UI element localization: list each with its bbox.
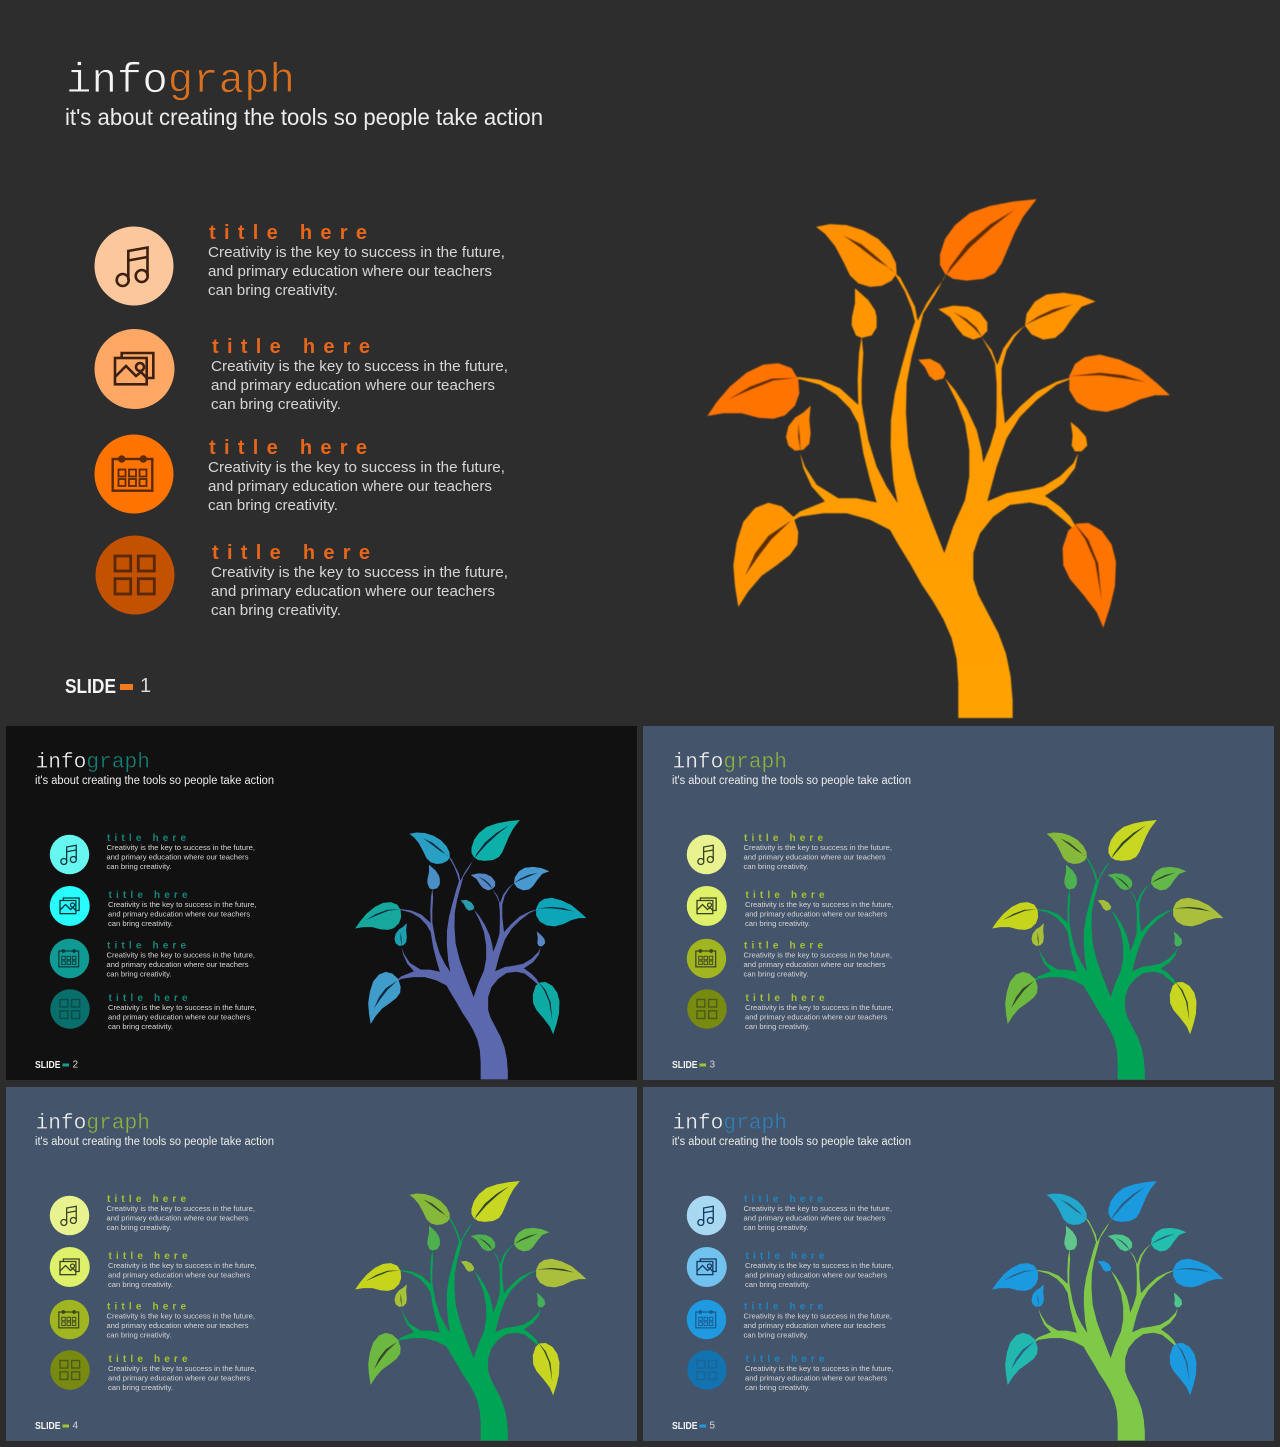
item text: can bring creativity. [208, 498, 338, 514]
item title: title here [212, 336, 370, 358]
item title: title here [744, 1194, 823, 1205]
list item 2 [50, 1247, 256, 1289]
item text [108, 1261, 256, 1289]
item text [744, 950, 892, 978]
list item 4 [50, 989, 256, 1031]
item text [744, 1312, 892, 1340]
leaves [355, 820, 586, 1034]
leaves [992, 820, 1223, 1034]
item title: title here [108, 993, 188, 1004]
trunk [1028, 856, 1184, 1080]
item title: title here [744, 1302, 823, 1312]
item text: can bring creativity. [744, 862, 808, 871]
item text: and primary education where our teachers [211, 584, 495, 600]
list item 1 [687, 1194, 892, 1235]
item text: Creativity is the key to success in the future, [208, 460, 505, 476]
tree illustration [355, 820, 586, 1080]
slide number [65, 675, 151, 698]
icon: calendar [687, 1300, 726, 1339]
subtitle: it's about creating the tools so people take action [672, 1135, 911, 1148]
subtitle: it's about creating the tools so people take action [35, 1135, 274, 1148]
slide number: 1 [140, 675, 151, 697]
item text [745, 1003, 894, 1031]
item text: and primary education where our teachers [108, 910, 250, 918]
item text: Creativity is the key to success in the future, [108, 1261, 256, 1270]
icon: music [50, 1196, 89, 1235]
list item 4 [96, 536, 508, 619]
item title: title here [744, 833, 823, 844]
item title: title here [746, 1354, 825, 1365]
item text: can bring creativity. [745, 919, 810, 928]
item text: and primary education where our teachers [108, 1012, 250, 1022]
subtitle: it's about creating the tools so people take action [672, 774, 911, 787]
item text: and primary education where our teachers [744, 1321, 886, 1330]
slide number: SLIDE [65, 676, 116, 698]
title: infograph: infograph [672, 1112, 787, 1136]
list item 4 [687, 1350, 894, 1392]
slide number: 4 [72, 1420, 78, 1432]
item text [211, 359, 508, 413]
slide number: 5 [710, 1420, 716, 1432]
item text: can bring creativity. [745, 1022, 810, 1031]
item text: and primary education where our teachers [108, 1270, 250, 1280]
item text: and primary education where our teachers [745, 910, 887, 918]
item text: Creativity is the key to success in the future, [745, 1003, 894, 1012]
icon: grid [96, 536, 174, 614]
item text [108, 1003, 256, 1031]
list item 1 [687, 833, 892, 874]
slide number [672, 1420, 716, 1432]
item text: Creativity is the key to success in the future, [744, 843, 892, 852]
item title: title here [209, 437, 367, 459]
slide number: SLIDE [672, 1060, 698, 1071]
item text [745, 1261, 894, 1289]
title: infograph: infograph [36, 1112, 150, 1136]
item text: Creativity is the key to success in the future, [211, 565, 508, 581]
icon: grid [687, 989, 727, 1029]
item text: Creativity is the key to success in the future, [106, 1204, 255, 1213]
icon: picture [94, 329, 174, 409]
item text [106, 843, 255, 871]
item text [108, 1364, 256, 1392]
item text [106, 1204, 255, 1232]
leaves [992, 1181, 1223, 1395]
item text: can bring creativity. [106, 1330, 172, 1340]
item text: and primary education where our teachers [744, 1214, 886, 1222]
trunk [391, 1217, 547, 1441]
item text [745, 1364, 894, 1392]
item text [745, 900, 894, 928]
item text: can bring creativity. [745, 1383, 810, 1392]
tree illustration [992, 820, 1223, 1080]
icon: picture [687, 1247, 727, 1287]
slide number: 3 [710, 1060, 716, 1070]
item text: can bring creativity. [744, 970, 808, 978]
item text: and primary education where our teachers [208, 479, 492, 495]
item text [744, 843, 892, 871]
slide number: SLIDE [35, 1421, 61, 1432]
title: infograph: infograph [672, 752, 787, 774]
panel: slide 1 [65, 57, 1170, 718]
icon: grid [50, 989, 90, 1029]
item text: Creativity is the key to success in the future, [211, 359, 508, 375]
item text: and primary education where our teachers [745, 1374, 887, 1382]
item text: can bring creativity. [108, 1022, 173, 1031]
item text: Creativity is the key to success in the future, [108, 1364, 256, 1373]
item text: and primary education where our teachers [211, 378, 495, 394]
item title: title here [107, 940, 186, 952]
icon: calendar [687, 939, 726, 978]
panel: slide 5 [643, 1087, 1274, 1441]
item text [211, 565, 508, 619]
item text: can bring creativity. [745, 1280, 810, 1289]
item text: Creativity is the key to success in the future, [106, 1312, 255, 1320]
slide number [672, 1060, 716, 1071]
list item 3 [50, 939, 255, 978]
item text: can bring creativity. [106, 1223, 172, 1232]
item text: and primary education where our teachers [106, 1321, 249, 1330]
list item 3 [687, 939, 892, 978]
icon: calendar [50, 939, 89, 978]
list item 4 [687, 989, 894, 1031]
item text: and primary education where our teachers [745, 1270, 887, 1280]
item text: can bring creativity. [211, 603, 341, 619]
title: infograph: infograph [66, 57, 295, 105]
item text: can bring creativity. [108, 919, 173, 928]
list item 1 [50, 833, 255, 874]
panel: slide 2 [6, 726, 637, 1080]
item text: Creativity is the key to success in the future, [745, 900, 894, 909]
item text: and primary education where our teachers [106, 960, 249, 969]
icon: calendar [50, 1300, 89, 1339]
list item 4 [50, 1350, 256, 1392]
item text: Creativity is the key to success in the future, [108, 1003, 256, 1012]
icon: grid [687, 1350, 727, 1390]
item text: Creativity is the key to success in the future, [106, 843, 255, 852]
leaves [707, 199, 1170, 628]
item text: can bring creativity. [208, 283, 338, 299]
list item 2 [687, 1247, 894, 1289]
item text: Creativity is the key to success in the future, [108, 900, 256, 909]
item title: title here [107, 1302, 186, 1312]
item text: Creativity is the key to success in the future, [744, 950, 892, 960]
icon: picture [50, 1247, 90, 1287]
item title: title here [746, 993, 825, 1004]
item text: can bring creativity. [106, 970, 172, 978]
item text: and primary education where our teachers [744, 852, 886, 862]
item text: Creativity is the key to success in the future, [745, 1364, 894, 1373]
slide number [35, 1060, 78, 1068]
item text [744, 1204, 892, 1232]
title: infograph: infograph [36, 752, 150, 774]
list item 2 [94, 329, 508, 413]
item text: can bring creativity. [106, 862, 172, 871]
icon: picture [50, 886, 90, 926]
item title: title here [108, 1251, 188, 1262]
item title: title here [744, 940, 823, 952]
item text [208, 245, 505, 299]
item text: and primary education where our teachers [106, 1214, 249, 1222]
tree illustration [355, 1181, 586, 1441]
item text: can bring creativity. [211, 397, 341, 413]
item title: title here [746, 1251, 825, 1262]
item text: Creativity is the key to success in the future, [744, 1204, 892, 1213]
list item 3 [94, 434, 505, 514]
item title: title here [746, 890, 825, 901]
item text: can bring creativity. [108, 1280, 173, 1289]
item text: Creativity is the key to success in the future, [208, 245, 505, 261]
item title: title here [108, 1354, 188, 1365]
item text [106, 950, 255, 978]
icon: music [50, 835, 89, 874]
icon: music [94, 226, 174, 306]
trunk [391, 856, 547, 1080]
item title: title here [108, 890, 188, 901]
item text: can bring creativity. [744, 1223, 808, 1232]
list item 3 [50, 1300, 255, 1340]
item text: and primary education where our teachers [745, 1012, 887, 1022]
subtitle: it's about creating the tools so people take action [65, 104, 543, 130]
item text: Creativity is the key to success in the future, [745, 1261, 894, 1270]
slide number: 2 [72, 1060, 78, 1070]
leaves [355, 1181, 586, 1395]
list item 2 [687, 886, 894, 928]
item text [108, 900, 256, 928]
tree illustration [992, 1181, 1223, 1441]
item text: Creativity is the key to success in the future, [106, 950, 255, 960]
panel: slide 3 [643, 726, 1274, 1080]
icon: music [687, 1196, 726, 1235]
item text: and primary education where our teachers [106, 852, 249, 862]
item text: and primary education where our teachers [108, 1374, 250, 1382]
icon: picture [687, 886, 727, 926]
subtitle: it's about creating the tools so people take action [35, 774, 274, 787]
item title: title here [209, 222, 367, 244]
item text [208, 460, 505, 514]
tree illustration [707, 199, 1170, 718]
item title: title here [107, 1194, 186, 1205]
item text: can bring creativity. [108, 1383, 173, 1392]
icon: grid [50, 1350, 90, 1390]
list item 1 [50, 1194, 255, 1235]
item text: can bring creativity. [744, 1330, 808, 1340]
trunk [1028, 1217, 1184, 1441]
icon: calendar [94, 434, 174, 514]
list item 1 [94, 222, 505, 306]
panel: slide 4 [6, 1087, 637, 1441]
item title: title here [212, 542, 370, 564]
list item 3 [687, 1300, 892, 1340]
item text: and primary education where our teachers [744, 960, 886, 969]
item title: title here [107, 833, 186, 844]
slide number [35, 1420, 78, 1432]
slide number: SLIDE [672, 1421, 698, 1432]
list item 2 [50, 886, 256, 928]
item text: and primary education where our teachers [208, 264, 492, 280]
slide number: SLIDE [35, 1060, 61, 1071]
item text: Creativity is the key to success in the future, [744, 1312, 892, 1320]
trunk [780, 272, 1091, 718]
icon: music [687, 835, 726, 874]
item text [106, 1312, 255, 1340]
